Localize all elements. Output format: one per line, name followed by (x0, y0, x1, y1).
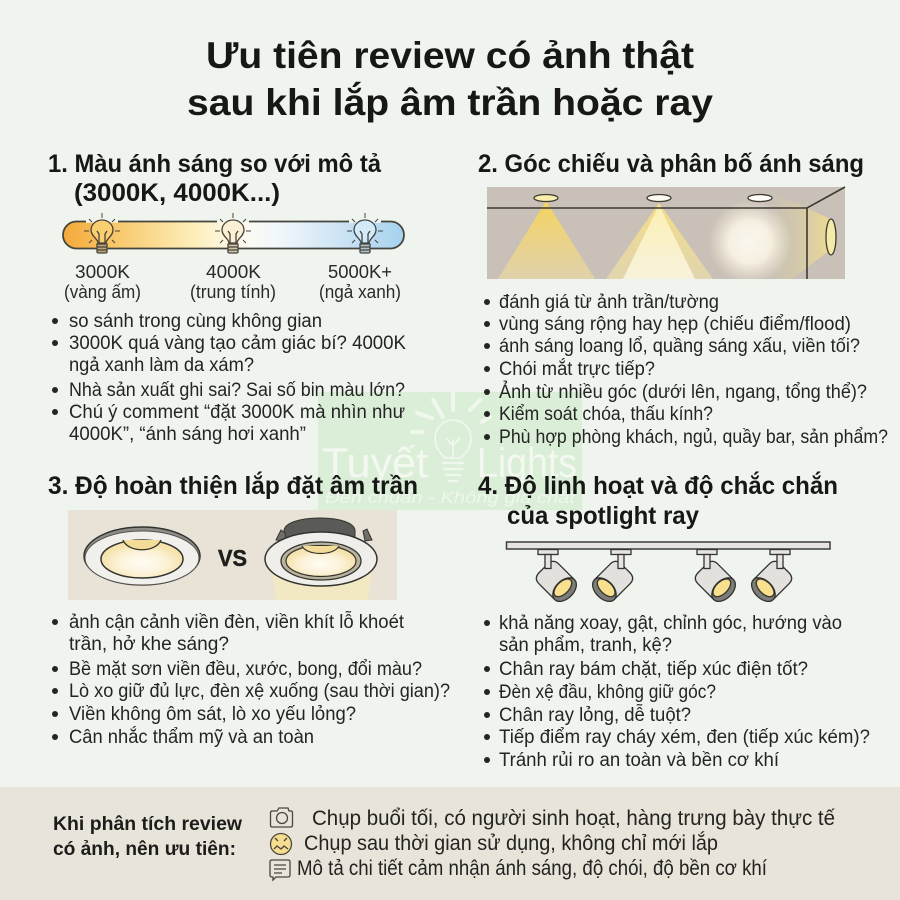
watermark: Tuyết Lights logo: Đèn chuẩn - Không giả chất (325, 488, 577, 507)
bullet list 4: khả năng xoay, gật, chỉnh góc, hướng vào (499, 613, 842, 634)
bullet list 1: 3000K quá vàng tạo cảm giác bí? 4000K (69, 333, 406, 354)
heading 1: 1. Màu ánh sáng so với mô tả (48, 150, 382, 178)
icon: neutral bulb (215, 213, 251, 253)
good downlight (84, 527, 200, 585)
panel: 2 beam angle (478, 150, 888, 448)
illustration: track and four spotlights (506, 542, 830, 606)
illustration: downlight comparison (68, 510, 397, 600)
bullet list 3: ảnh cận cảnh viền đèn, viền khít lỗ khoét (69, 611, 405, 633)
bullet list 4: Tránh rủi ro an toàn và bền cơ khí (499, 750, 780, 771)
panel: 4 track spotlight (478, 470, 870, 771)
footer lead text: có ảnh, nên ưu tiên: (53, 839, 236, 860)
bullet list 2 (484, 292, 888, 448)
watermark: Tuyết Lights logo: Tuyết (322, 439, 428, 486)
heading 3: 3. Độ hoàn thiện lắp đặt âm trần (48, 470, 418, 500)
icon: worn face (270, 834, 292, 854)
bullet list 3: trần, hở khe sáng? (69, 634, 229, 655)
VS label: VS (218, 545, 247, 571)
heading 1 (48, 150, 382, 207)
bullet list 2: ánh sáng loang lổ, quầng sáng xấu, viền tối? (499, 336, 860, 357)
watermark: Tuyết Lights logo: Lights (477, 439, 577, 486)
bullet list 2: đánh giá từ ảnh trần/tường (499, 292, 719, 313)
spotlight 4 (747, 550, 795, 606)
icon: comment bubble (270, 860, 290, 880)
bullet list 2: Ảnh từ nhiều góc (dưới lên, ngang, tổng thể)? (499, 381, 867, 403)
watermark: Tuyết Lights logo (318, 392, 582, 510)
temperature labels: 4000K (206, 262, 261, 282)
temperature labels (64, 262, 401, 302)
bullet list 4: Tiếp điểm ray cháy xém, đen (tiếp xúc kém)? (499, 727, 870, 748)
bullet list 3: Bề mặt sơn viền đều, xước, bong, đổi màu? (69, 659, 422, 680)
temperature labels: (trung tính) (190, 282, 276, 302)
bullet list 4: Chân ray bám chặt, tiếp xúc điện tốt? (499, 659, 808, 680)
panel: 3 recessed finish (48, 470, 450, 748)
bullet list 1: Nhà sản xuất ghi sai? Sai số bin màu lớn? (69, 380, 405, 401)
bullet list 4: sản phẩm, tranh, kệ? (499, 635, 672, 656)
temperature labels: 5000K+ (328, 262, 392, 282)
bullet list 3: Lò xo giữ đủ lực, đèn xệ xuống (sau thời gian)? (69, 681, 450, 702)
footer panel (0, 787, 900, 900)
heading 2: 2. Góc chiếu và phân bố ánh sáng (478, 150, 864, 178)
heading 4: của spotlight ray (507, 502, 699, 530)
footer lead text: Khi phân tích review (53, 814, 242, 835)
bullet list 2: vùng sáng rộng hay hẹp (chiếu điểm/flood) (499, 314, 851, 335)
temperature labels: (ngả xanh) (319, 282, 401, 302)
bullet list 3: Cân nhắc thẩm mỹ và an toàn (69, 726, 314, 748)
title: Ưu tiên review có ảnh thật (206, 35, 694, 76)
temperature labels: 3000K (75, 262, 130, 282)
bullet list 1: ngả xanh làm da xám? (69, 355, 254, 376)
footer item 3: Mô tả chi tiết cảm nhận ánh sáng, độ chói, độ bền cơ khí (297, 857, 767, 880)
icon: camera (270, 808, 292, 827)
bullet list 4 (484, 613, 870, 771)
bullet list 4: Đèn xệ đầu, không giữ góc? (499, 682, 716, 703)
bullet list 2: Kiểm soát chóa, thấu kính? (499, 404, 713, 425)
heading 1: (3000K, 4000K...) (74, 179, 280, 207)
bullet list 4: Chân ray lỏng, dễ tuột? (499, 704, 691, 726)
footer lead text (53, 814, 242, 860)
bullet list 3: Viền không ôm sát, lò xo yếu lỏng? (69, 704, 356, 725)
bullet list 1: so sánh trong cùng không gian (69, 311, 322, 332)
footer item 1: Chụp buổi tối, có người sinh hoạt, hàng trưng bày thực tế (312, 807, 835, 830)
bullet list 1 (52, 311, 406, 445)
panel: 1 light colour (48, 150, 406, 445)
spotlight 3 (692, 550, 740, 606)
temperature labels: (vàng ấm) (64, 282, 141, 302)
heading 4 (478, 470, 838, 530)
bullet list 1: Chú ý comment “đặt 3000K mà nhìn như (69, 402, 405, 423)
icon: warm bulb (84, 213, 120, 253)
icon: cool bulb (347, 213, 383, 253)
colour temperature bar (63, 222, 404, 248)
title (187, 35, 713, 123)
poor downlight (265, 518, 377, 600)
bullet list 2: Chói mắt trực tiếp? (499, 358, 655, 380)
footer item 2: Chụp sau thời gian sử dụng, không chỉ mới lắp (304, 832, 718, 855)
title: sau khi lắp âm trần hoặc ray (187, 81, 713, 123)
spotlight 1 (533, 550, 581, 606)
spotlight 2 (588, 550, 636, 606)
bullet list 1: 4000K”, “ánh sáng hơi xanh” (69, 424, 306, 445)
illustration: ceiling and wall light beams (487, 187, 845, 284)
bullet list 3 (52, 611, 450, 748)
heading 4: 4. Độ linh hoạt và độ chắc chắn (478, 470, 838, 500)
